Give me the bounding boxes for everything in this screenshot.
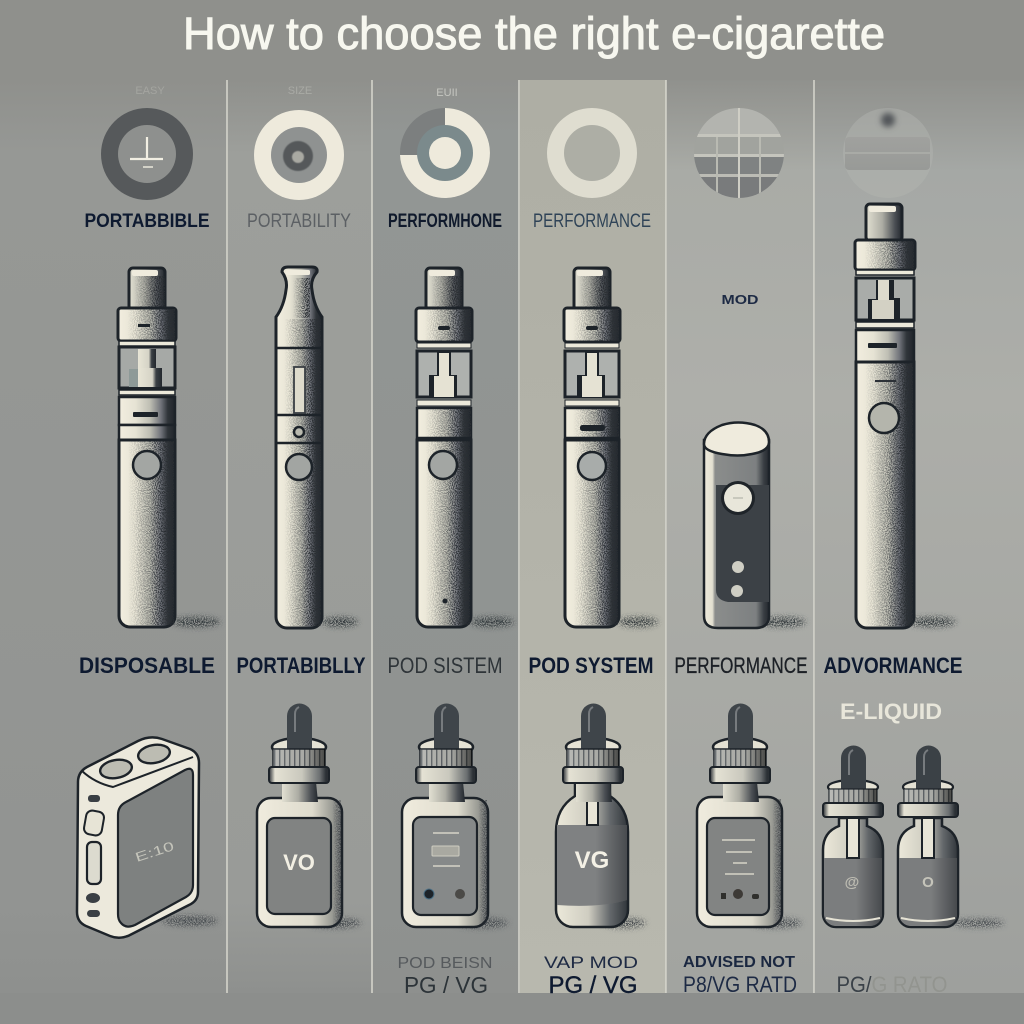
label: DISPOSABLE: DISPOSABLE: [79, 653, 215, 678]
bottle: VO: VO: [283, 850, 315, 875]
label: POD BEISN: POD BEISN: [398, 955, 492, 972]
label: top heading: PORTABBIBLE: [84, 211, 210, 232]
device: vape pen: [416, 268, 514, 627]
panel: column 3: [373, 80, 519, 998]
panel: column 5: [667, 80, 814, 997]
bottle: lined label: [402, 704, 508, 928]
label: E-LIQUID: E-LIQUID: [840, 699, 942, 724]
panel: column 1: [0, 80, 227, 993]
label: ADVISED NOT: ADVISED NOT: [683, 954, 795, 971]
icon: box mod: [77, 737, 218, 938]
bottle pair: small droppers: [823, 746, 1004, 927]
label: POD SISTEM: POD SISTEM: [388, 653, 502, 678]
label: PG / VG: PG / VG: [548, 972, 638, 999]
device: vape pen: [564, 268, 658, 627]
panel: column 6: [815, 80, 1024, 997]
icon: segmented donut: [400, 108, 490, 198]
panel: column 4: [520, 80, 666, 999]
label: MOD: MOD: [722, 292, 758, 307]
label: PERFORMANCE: PERFORMANCE: [674, 653, 808, 678]
device: tall vape pen: [855, 204, 956, 628]
device: vape pen: [118, 268, 220, 627]
bottle pair: small droppers: @: [845, 874, 859, 891]
bottle: VG: VG: [575, 847, 609, 874]
column dividers: [227, 80, 814, 993]
icon: dark ring with T glyph: [101, 108, 193, 200]
bottle pair: small droppers: O: [922, 874, 934, 891]
icon: faint dial: [843, 108, 933, 198]
device: slim pen: [276, 267, 358, 628]
icon: cream ring: [547, 108, 637, 198]
ghost text: EUII: [436, 87, 458, 99]
icon: grid sphere: [694, 108, 784, 202]
panel: column 2: [228, 80, 372, 993]
label: ADVORMANCE: ADVORMANCE: [824, 653, 962, 678]
ghost text: EASY: [135, 85, 165, 97]
device: pod: [704, 422, 806, 628]
bottle: VO: [257, 704, 361, 928]
label: PG / VG: PG / VG: [404, 972, 488, 998]
ghost text: SIZE: [288, 85, 312, 97]
label: PG/VG RATIO: P8/VG RATD: [683, 972, 797, 997]
label: top heading: PORTABILITY: [247, 211, 351, 232]
label: POD SYSTEM: POD SYSTEM: [528, 653, 654, 678]
label: PORTABIBLLY: PORTABIBLLY: [236, 653, 366, 678]
bottle: lined label: [697, 704, 802, 928]
icon: cream ring with lens: [254, 110, 344, 200]
label: top heading: PERFORMHONE: [388, 211, 502, 232]
bottle: VG: [556, 704, 646, 928]
screen text: E:10: [133, 838, 176, 865]
label: VAP MOD: VAP MOD: [544, 953, 638, 972]
title: How to choose the right e-cigarette: [183, 8, 885, 59]
label: PG/ RATIO: PG/G RATO: [836, 972, 948, 997]
label: top heading: PERFORMANCE: [533, 211, 651, 232]
